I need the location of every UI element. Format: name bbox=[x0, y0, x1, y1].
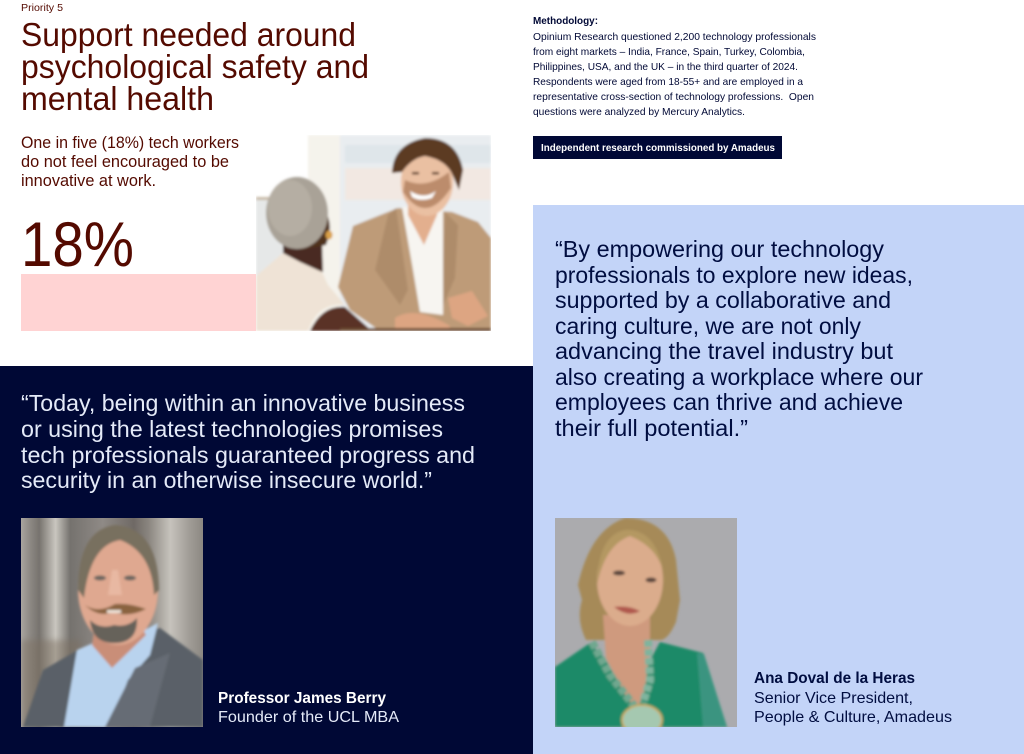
beard bbox=[90, 618, 137, 643]
quote text: professionals to explore new ideas, bbox=[555, 262, 913, 288]
priority label: Priority 5 bbox=[21, 2, 63, 14]
attribution: Ana Doval de la Heras bbox=[754, 670, 952, 726]
quote text: supported by a collaborative and bbox=[555, 287, 891, 313]
attribution: Ana Doval de la Heras: People & Culture, Amadeus bbox=[754, 709, 952, 726]
statistic description: innovative at work. bbox=[21, 172, 156, 190]
attribution: Ana Doval de la Heras: Senior Vice President, bbox=[754, 690, 913, 707]
methodology text: from eight markets – India, France, Spain, Turkey, Colombia, bbox=[533, 47, 805, 58]
attribution: Professor James Berry: Founder of the UCL MBA bbox=[218, 709, 399, 726]
shirt bbox=[64, 623, 158, 727]
title bbox=[21, 16, 369, 117]
neck bbox=[92, 625, 146, 668]
photo: Professor James Berry bbox=[21, 518, 203, 727]
quote text: also creating a workplace where our bbox=[555, 364, 923, 390]
methodology text: Respondents were aged from 18-55+ and are employed in a bbox=[533, 77, 803, 88]
man's hands bbox=[395, 313, 450, 331]
methodology text: Opinium Research questioned 2,200 technology professionals bbox=[533, 32, 816, 43]
hair fringe bbox=[596, 530, 660, 582]
title: psychological safety and bbox=[21, 48, 369, 85]
quote text bbox=[21, 390, 475, 493]
quote text: employees can thrive and achieve bbox=[555, 389, 903, 415]
statistic description: do not feel encouraged to be bbox=[21, 153, 229, 171]
methodology text: Methodology: bbox=[533, 16, 598, 27]
jacket bbox=[23, 628, 203, 727]
eyes and teeth bbox=[94, 576, 106, 580]
attribution: Professor James Berry: Professor James Berry bbox=[218, 690, 386, 707]
neck and chest bbox=[603, 615, 650, 708]
man's jacket bbox=[338, 208, 491, 331]
methodology text: Philippines, USA, and the UK – in the third quarter of 2024. bbox=[533, 62, 798, 73]
badge: commissioned research: Independent research commissioned by Amadeus bbox=[541, 143, 775, 154]
quote text: advancing the travel industry but bbox=[555, 338, 894, 364]
panel: methodology bbox=[533, 16, 816, 159]
badge: commissioned research bbox=[533, 136, 782, 159]
woman's head bbox=[316, 216, 332, 247]
panel: Ana Doval de la Heras quote bbox=[533, 205, 1024, 754]
quote text: caring culture, we are not only bbox=[555, 313, 861, 339]
hair bbox=[78, 525, 159, 598]
photo: two colleagues talking bbox=[256, 135, 491, 331]
light blue background bbox=[533, 205, 1024, 754]
statistic: 18%: 18% bbox=[21, 210, 134, 280]
eyes and mouth bbox=[613, 570, 625, 576]
photo: Ana Doval de la Heras bbox=[555, 518, 737, 735]
moustache bbox=[85, 604, 146, 614]
title: Support needed around bbox=[21, 16, 356, 53]
quote text bbox=[555, 236, 923, 441]
navy background bbox=[0, 366, 533, 754]
attribution: Professor James Berry bbox=[218, 690, 399, 726]
face bbox=[597, 534, 663, 626]
blouse bbox=[555, 641, 705, 727]
quote text: or using the latest technologies promises bbox=[21, 416, 443, 442]
panel: Professor James Berry quote bbox=[0, 366, 533, 754]
panel: priority heading and statistic bbox=[21, 2, 369, 331]
face bbox=[78, 535, 158, 645]
methodology text bbox=[533, 16, 816, 118]
pendant bbox=[622, 705, 662, 735]
statistic description: One in five (18%) tech workers bbox=[21, 134, 239, 152]
necklace bbox=[592, 642, 635, 707]
quote text: security in an otherwise insecure world.” bbox=[21, 467, 432, 493]
woman's neck and shoulder bbox=[283, 240, 323, 272]
attribution: Ana Doval de la Heras: Ana Doval de la Heras bbox=[754, 670, 915, 687]
statistic description bbox=[21, 134, 239, 190]
quote text: tech professionals guaranteed progress and bbox=[21, 442, 475, 468]
methodology text: questions were analyzed by Mercury Analytics. bbox=[533, 107, 745, 118]
man's neck bbox=[408, 198, 438, 245]
pink statistic bar bbox=[21, 274, 256, 331]
methodology text: representative cross-section of technology professions. Open bbox=[533, 92, 814, 103]
quote text: their full potential.” bbox=[555, 415, 748, 441]
man's eyes bbox=[412, 172, 419, 174]
quote text: “Today, being within an innovative business bbox=[21, 390, 465, 416]
title: mental health bbox=[21, 80, 214, 117]
man's hair bbox=[392, 138, 463, 190]
man's shirt bbox=[402, 207, 443, 315]
woman's top bbox=[256, 253, 345, 331]
quote text: “By empowering our technology bbox=[555, 236, 885, 262]
man's face bbox=[401, 148, 453, 216]
hair bbox=[578, 518, 680, 640]
